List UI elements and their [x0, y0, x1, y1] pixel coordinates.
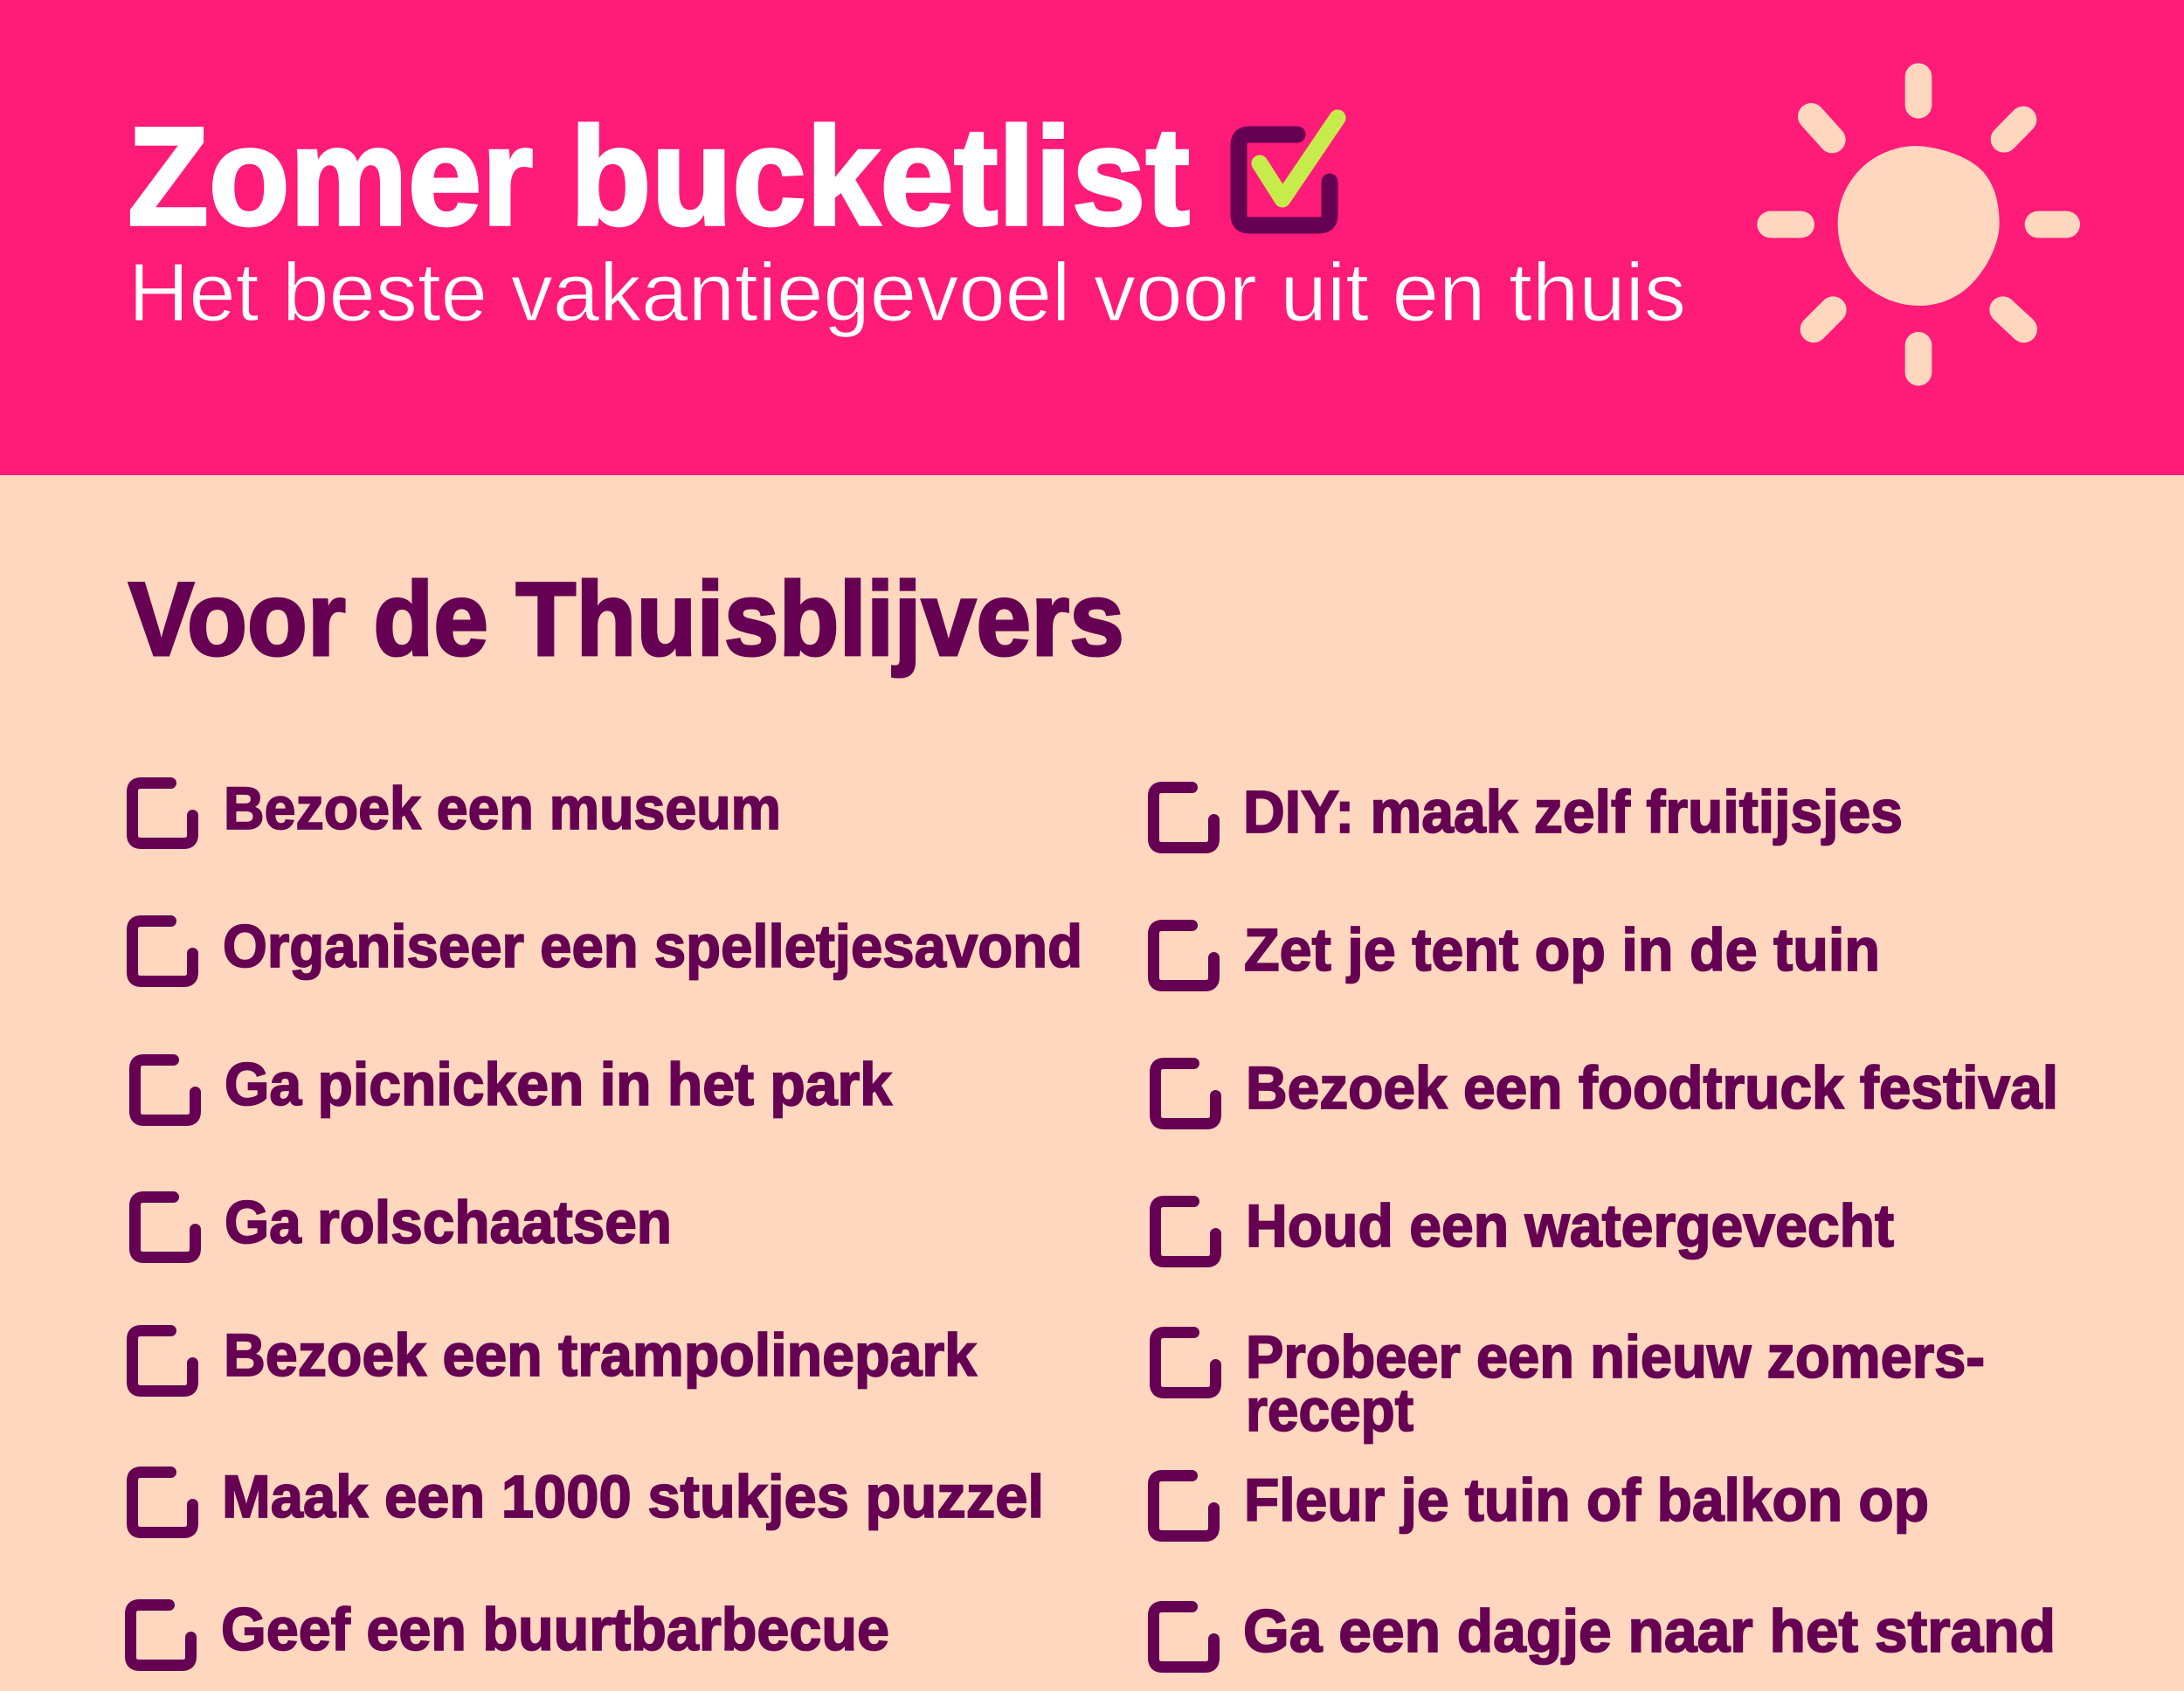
list item: Maak een 1000 stukjes puzzel	[133, 1463, 1044, 1532]
icon: checkbox	[1155, 1064, 1216, 1123]
icon: checkbox	[133, 1473, 192, 1532]
list item: Probeer een nieuw zomers-recept	[1155, 1323, 1985, 1444]
list item: Ga picnicken in het park	[135, 1051, 893, 1120]
heading: Voor de Thuisblijvers: Voor de Thuisblijvers	[128, 561, 1124, 678]
icon: sun	[1771, 77, 2067, 372]
label: Zet je tent op in de tuin	[1244, 916, 1880, 984]
icon: checkbox	[133, 1331, 192, 1391]
label, two lines: Probeer een nieuw zomers-	[1246, 1323, 1985, 1391]
label: Geef een buurtbarbecue	[221, 1596, 889, 1663]
icon: checkbox	[1153, 1607, 1214, 1667]
label: Bezoek een foodtruck festival	[1246, 1054, 2058, 1122]
label: Fleur je tuin of balkon op	[1244, 1467, 1929, 1534]
label, two lines	[1246, 1323, 1985, 1444]
list item: Houd een watergevecht	[1155, 1192, 1894, 1261]
label: Organiseer een spelletjesavond	[223, 913, 1082, 980]
list item: Zet je tent op in de tuin	[1153, 916, 1880, 985]
list item: Ga rolschaatsen	[135, 1189, 672, 1258]
panel: right checklist column	[1153, 778, 2058, 1667]
icon: checkbox	[1153, 926, 1214, 985]
label: Ga een dagje naar het strand	[1243, 1598, 2056, 1665]
list item: Ga een dagje naar het strand	[1153, 1598, 2056, 1667]
list item: Bezoek een museum	[133, 775, 781, 844]
list item: Organiseer een spelletjesavond	[133, 913, 1082, 982]
icon: checkbox	[131, 1605, 190, 1665]
title: Zomer bucketlist	[128, 98, 1190, 254]
icon: checked checkbox	[1239, 118, 1337, 225]
subtitle: Het beste vakantiegevoel voor uit en thuis	[128, 246, 1686, 339]
label: Bezoek een trampolinepark	[224, 1322, 978, 1389]
list item: Bezoek een foodtruck festival	[1155, 1054, 2058, 1123]
icon: checkbox	[135, 1197, 196, 1258]
label: Houd een watergevecht	[1246, 1192, 1894, 1260]
label: Ga picnicken in het park	[225, 1051, 893, 1118]
panel: pink header	[0, 0, 2184, 475]
icon: checkbox	[135, 1060, 196, 1120]
list item: Fleur je tuin of balkon op	[1153, 1467, 1929, 1536]
icon: checkbox	[1153, 1476, 1214, 1536]
icon: checkbox	[1155, 1202, 1216, 1261]
icon: checkbox	[133, 921, 192, 982]
panel: left checklist column	[131, 775, 1082, 1665]
list item: DIY: maak zelf fruitijsjes	[1153, 778, 1903, 847]
label: Maak een 1000 stukjes puzzel	[222, 1463, 1044, 1530]
label: Bezoek een museum	[224, 775, 781, 842]
label, two lines: recept	[1246, 1377, 1413, 1444]
list item: Geef een buurtbarbecue	[131, 1596, 889, 1665]
icon: checkbox	[1155, 1333, 1216, 1392]
icon: checkbox	[1153, 788, 1214, 847]
label: DIY: maak zelf fruitijsjes	[1243, 778, 1903, 846]
list item: Bezoek een trampolinepark	[133, 1322, 978, 1391]
label: Ga rolschaatsen	[225, 1189, 672, 1256]
icon: checkbox	[133, 783, 192, 844]
